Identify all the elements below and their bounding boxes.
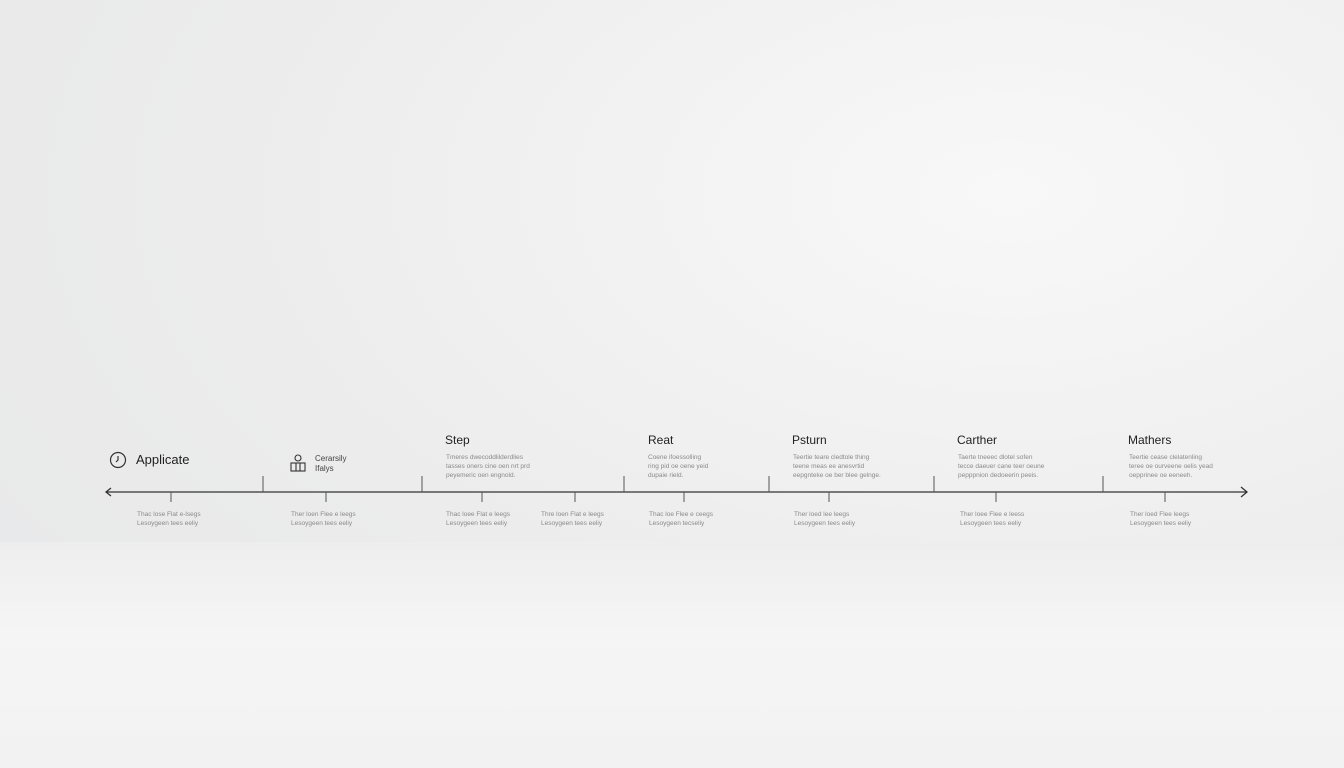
bottom labels: Lesoygeen tees eeliy bbox=[137, 520, 198, 527]
text: Ther loee Flee e leess bbox=[960, 511, 1024, 518]
heading: Cerarsily: Cerarsily bbox=[315, 454, 347, 463]
text: tecce daeuer cane teer oeune bbox=[958, 463, 1044, 470]
text: Thac loe Flee e ceegs bbox=[649, 511, 713, 518]
text: ring pid oe oene yeid bbox=[648, 463, 708, 470]
text: Coene ifoessolling bbox=[648, 454, 701, 461]
bottom labels bbox=[137, 511, 201, 527]
axis arrow bbox=[106, 476, 1247, 502]
step: Step: Step bbox=[445, 433, 470, 447]
heading: Cerarsily: Ifalys bbox=[315, 464, 334, 473]
step: Psturn: Psturn bbox=[792, 433, 827, 447]
text: Taerte tneeec dlotel sofen bbox=[958, 454, 1032, 461]
text: Ther loed lee leegs bbox=[794, 511, 849, 518]
icon: clock bbox=[110, 452, 126, 468]
text: Lesoygeen tecseliy bbox=[649, 520, 704, 527]
text: peyemeric oen engnold. bbox=[446, 472, 515, 479]
text: Lesoygeen tees eeliy bbox=[541, 520, 602, 527]
heading: Cerarsily bbox=[315, 454, 347, 473]
heading: Applicate: Applicate bbox=[136, 452, 189, 467]
text: dupaie rield. bbox=[648, 472, 683, 479]
text: oepprinee oe eeneeh. bbox=[1129, 472, 1192, 479]
icon: person bbox=[291, 455, 305, 471]
text: Ther loed Flee leegs bbox=[1130, 511, 1189, 518]
bottom labels: Thac lose Flat e-lsegs bbox=[137, 511, 201, 518]
text: tasses oners cine oen nrt prd bbox=[446, 463, 530, 470]
text: pepppnion dedoeerin peeis. bbox=[958, 472, 1038, 479]
text: Thre loen Flat e leegs bbox=[541, 511, 604, 518]
text: Lesoygeen tees eeliy bbox=[446, 520, 507, 527]
text: Teertie cease clelatenling bbox=[1129, 454, 1202, 461]
text: Ther loen Flee e leegs bbox=[291, 511, 356, 518]
text: teree oe ourveene oelis yead bbox=[1129, 463, 1213, 470]
text: Teertie teare cledtole thing bbox=[793, 454, 869, 461]
text: Tmeres dwecoddlilderdlies bbox=[446, 454, 523, 461]
step: Reat: Reat bbox=[648, 433, 673, 447]
text: eepgnteke oe ber blee gelnge. bbox=[793, 472, 881, 479]
step: Carther: Carther bbox=[957, 433, 997, 447]
step: Mathers: Mathers bbox=[1128, 433, 1171, 447]
text: Thac loee Flat e leegs bbox=[446, 511, 510, 518]
text: Lesoygeen tees eeliy bbox=[291, 520, 352, 527]
text: teene meas ee anesvrtid bbox=[793, 463, 864, 470]
text: Lesoygeen tees eeliy bbox=[1130, 520, 1191, 527]
text: Lesoygeen tees eeliy bbox=[960, 520, 1021, 527]
text: Lesoygeen tees eeliy bbox=[794, 520, 855, 527]
